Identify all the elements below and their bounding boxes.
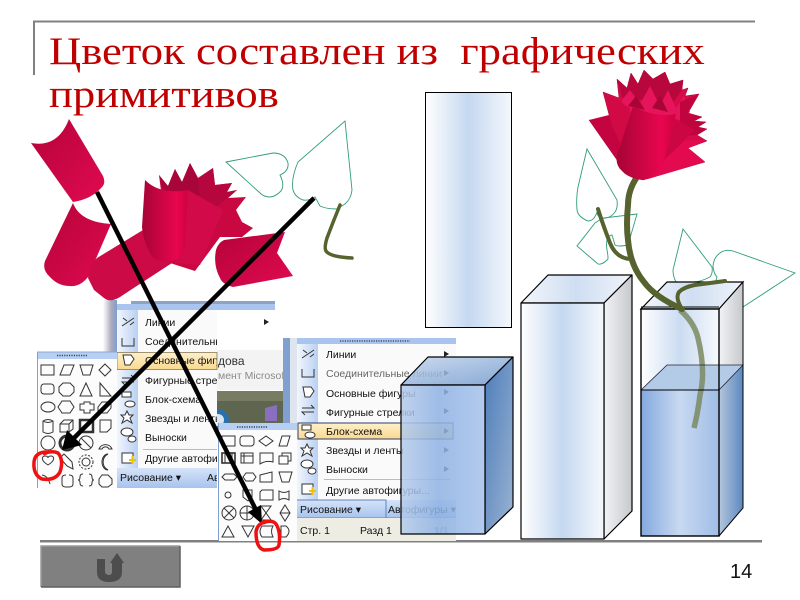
background document window: мент Microsoft [218, 370, 287, 382]
arrow: leaf to heart shape [62, 198, 314, 450]
vase cube with water [641, 282, 743, 536]
water [641, 365, 743, 390]
highlight circle: stored data shape [256, 521, 280, 550]
slide number: 14 [730, 561, 752, 583]
palette shape icons [41, 364, 112, 487]
menu labels: Автофигуры ▾ [388, 504, 457, 516]
loose petal: long middle [88, 230, 172, 300]
loose petal: upper left [31, 119, 104, 202]
loose stem [325, 205, 352, 258]
icon: u-turn arrow [97, 553, 124, 582]
shape palette: flowchart [218, 423, 297, 541]
menu labels: Автофигуры [207, 472, 267, 484]
submerged stem [680, 310, 703, 428]
menu labels: Соединительные [145, 336, 229, 348]
title: Цветок составлен из графических [49, 31, 705, 73]
background document window: дова [218, 354, 245, 368]
menu labels: Рисование ▾ [300, 504, 362, 516]
submenu arrows [444, 351, 449, 472]
menu labels: Основные фигуры [145, 355, 235, 367]
menu labels: Линии [145, 317, 175, 329]
menu labels: Фигурные стрелки [326, 407, 415, 419]
submenu arrow [264, 319, 269, 325]
loose petal: right [215, 232, 293, 287]
menu labels: Стр. 1 [300, 525, 330, 537]
tall glass rectangle [426, 92, 512, 328]
menu labels: Линии [326, 349, 356, 361]
background document window [207, 338, 297, 431]
arrow: petal to flowchart shape [97, 192, 262, 524]
menu labels: Соединительные линии [326, 368, 442, 380]
menu labels: Блок-схема [326, 426, 382, 438]
middle cube: empty glass [521, 275, 632, 539]
menu labels: Выноски [326, 464, 368, 476]
palette shape icons [222, 436, 292, 537]
menu panel: autoshapes [297, 338, 457, 541]
menu labels: Разд 1 [360, 525, 392, 537]
rose stem [598, 177, 725, 309]
menu labels: Основные фигуры [326, 388, 416, 400]
menu icons [301, 350, 316, 494]
loose petal: lower left [44, 203, 111, 286]
menu labels [120, 319, 217, 481]
left cube: solid blue [401, 357, 513, 534]
menu labels: Фигурные стрелки [145, 375, 234, 387]
menu labels: Другие автофигуры... [326, 485, 430, 497]
partial flower cluster [142, 163, 253, 271]
loose leaves [226, 121, 352, 209]
inner petals [617, 70, 683, 104]
menu window: basic shapes [103, 300, 297, 488]
shape palette: basic shapes [37, 352, 117, 488]
title: примитивов [49, 74, 279, 116]
front petal [617, 106, 676, 180]
menu labels [300, 349, 457, 537]
back button [41, 546, 180, 587]
assembled rose [589, 70, 707, 180]
menu labels: Другие автофигуры [145, 453, 240, 465]
menu labels: 1/1 [434, 525, 449, 537]
menu labels: Выноски [145, 432, 187, 444]
menu labels: Блок-схема [145, 394, 201, 406]
leaves around rose [577, 149, 795, 309]
highlight circle: heart shape [34, 452, 62, 479]
menu labels: Звезды и ленты [326, 445, 404, 457]
window shadow [103, 300, 117, 352]
menu labels: Звезды и ленты [145, 413, 222, 425]
menu icons [121, 318, 136, 463]
menu labels: Рисование ▾ [120, 472, 182, 484]
frame lines [34, 22, 762, 542]
